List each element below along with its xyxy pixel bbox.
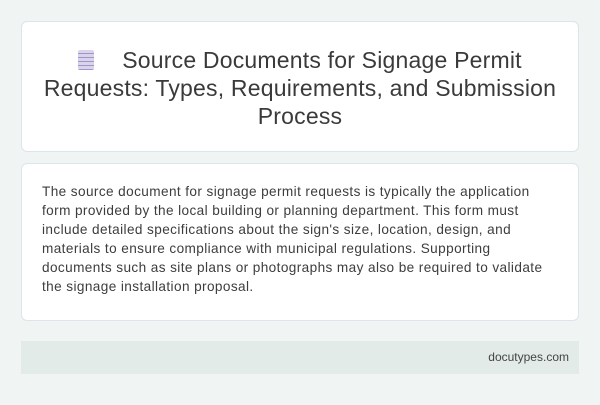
panel: description <box>21 163 579 321</box>
title: Requests: Types, Requirements, and Submission <box>44 75 556 101</box>
body text <box>42 184 542 294</box>
body text: form provided by the local building or planning department. This form must <box>42 203 519 218</box>
panel: title card <box>21 21 579 152</box>
body text: the signage installation proposal. <box>42 279 254 294</box>
title: Process <box>258 103 342 129</box>
body text: materials to ensure compliance with municipal regulations. Supporting <box>42 241 490 256</box>
footer text: docutypes.com <box>488 350 569 364</box>
body text: include detailed specifications about the sign's size, location, design, and <box>42 222 511 237</box>
title: Source Documents for Signage Permit <box>122 47 522 73</box>
icon: receipt document <box>78 50 94 70</box>
body text: documents such as site plans or photographs may also be required to validate <box>42 260 542 275</box>
title <box>44 47 556 129</box>
body text: The source document for signage permit requests is typically the application <box>42 184 530 199</box>
footer bar <box>21 341 579 374</box>
